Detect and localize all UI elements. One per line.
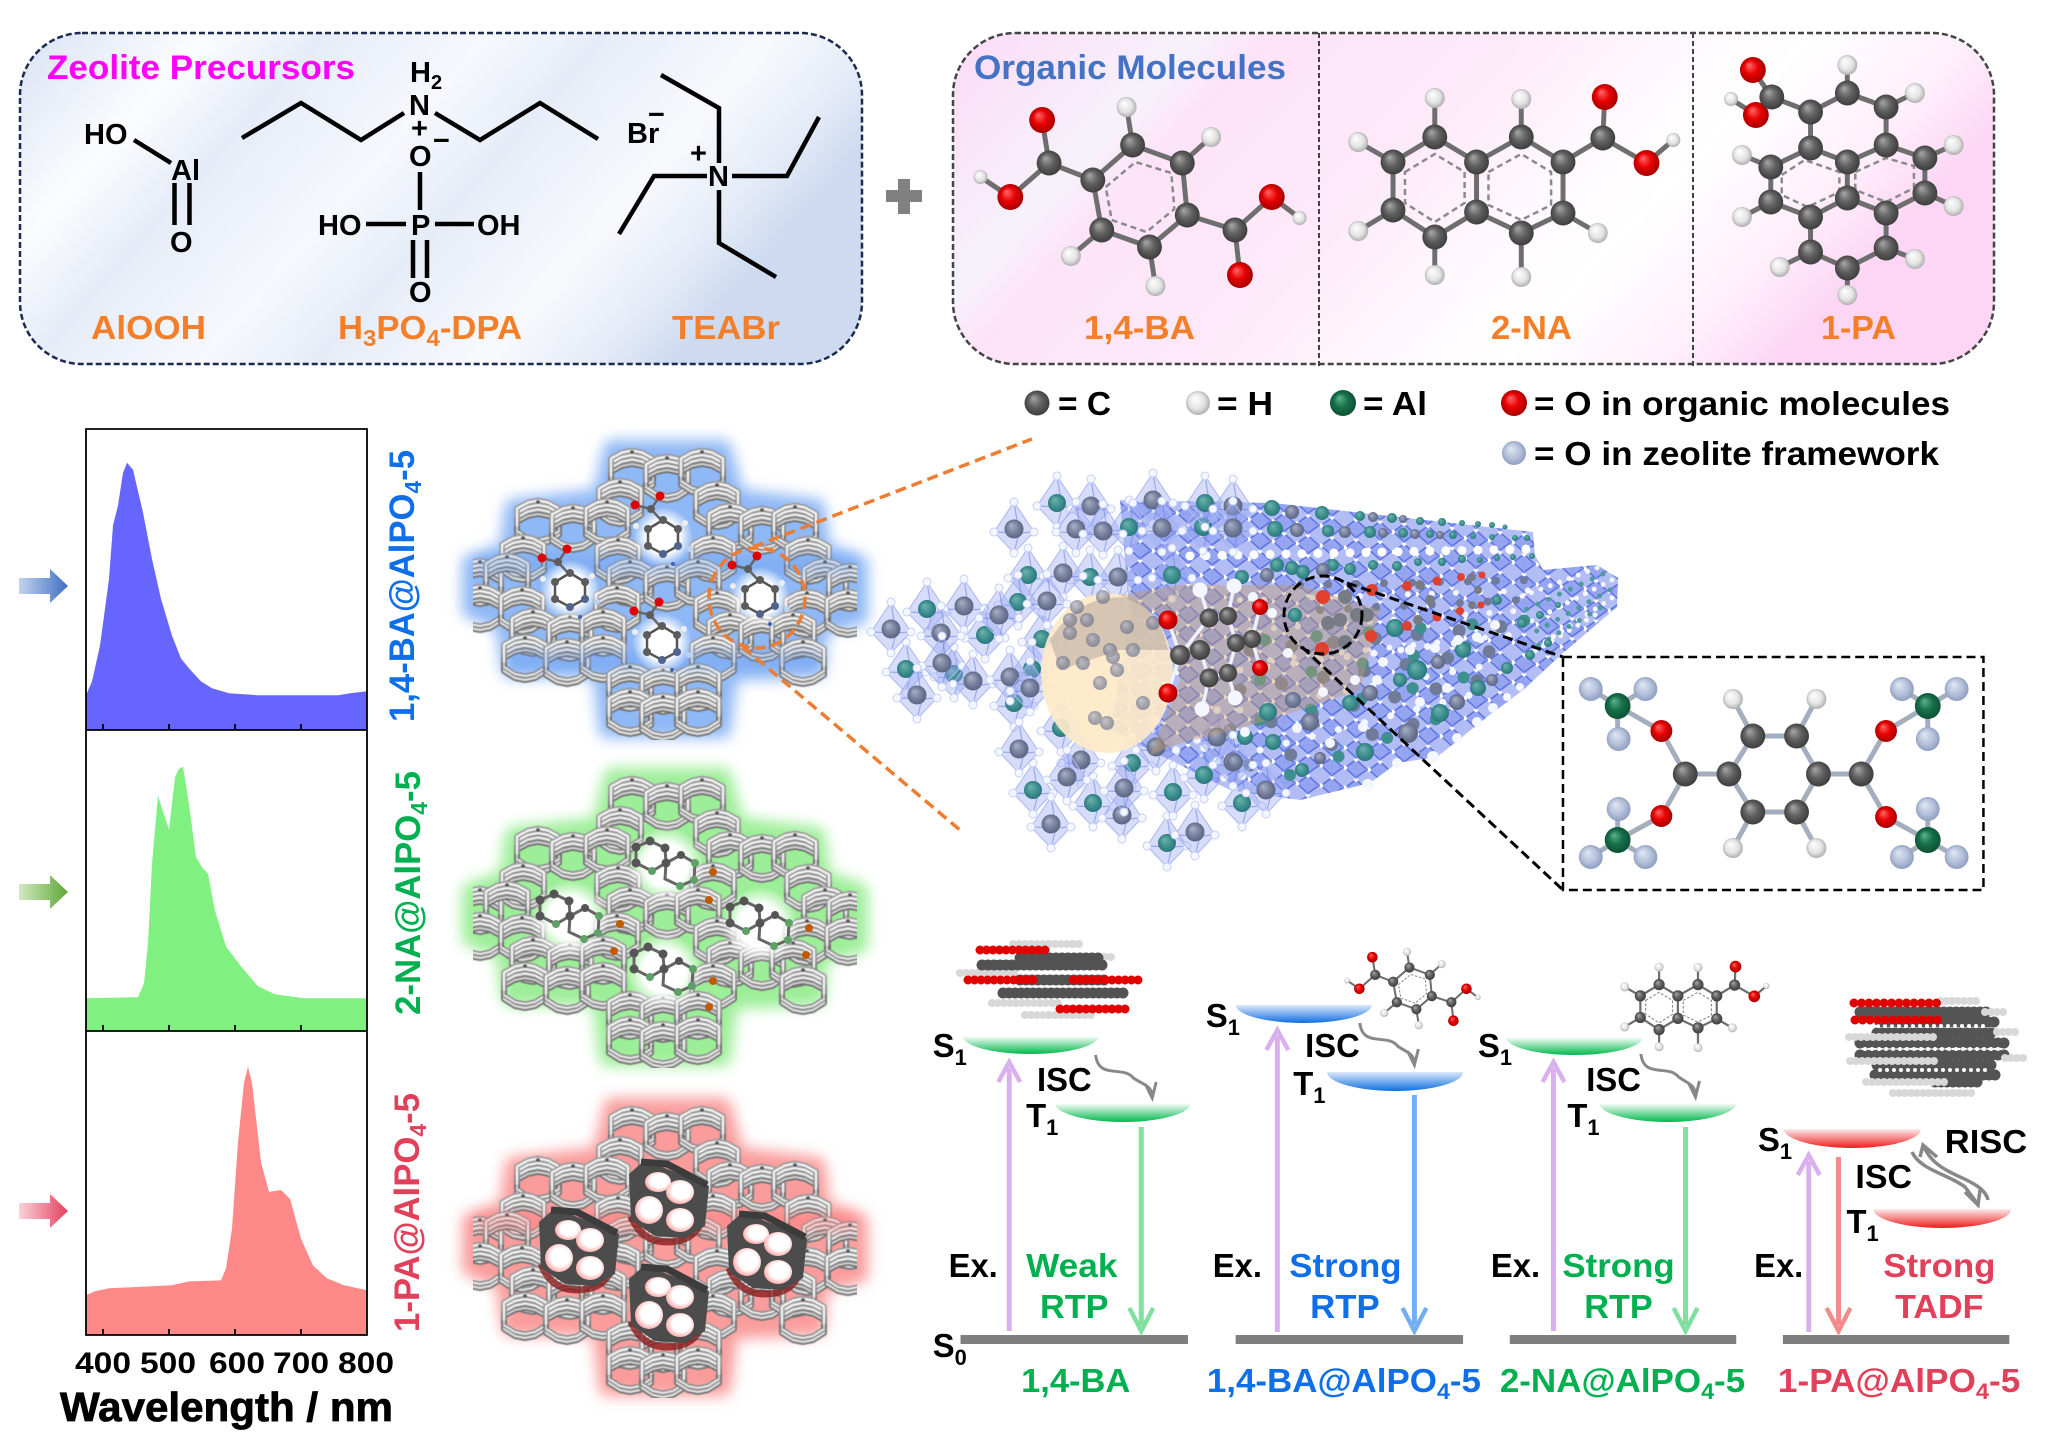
label: 1,4-BA@AlPO4-5 vertical: 1,4-BA@AlPO [383,491,422,722]
energy diagram: 2-NA@AlPO4-5: 2-NA@AlPO [1500,1362,1688,1399]
far tetrahedra rows [1230,568,1612,775]
molecule stack: 1-PA crystal [1849,1001,2025,1093]
energy diagram: 1,4-BA: 0 [955,1345,967,1370]
arrows: ISC and RISC [1912,1145,1988,1205]
energy diagram: 1-PA@AlPO4-5 [1754,1121,2027,1404]
energy diagram: 2-NA@AlPO4-5: Strong [1562,1247,1675,1284]
energy diagram: 1,4-BA: Weak [1026,1247,1118,1284]
label: 1-PA@AlPO4-5 vertical: 4 [405,1124,431,1137]
energy diagram: 1,4-BA@AlPO4-5: S [1206,997,1228,1034]
energy diagram: 2-NA@AlPO4-5: Ex. [1491,1247,1540,1284]
energy diagram: 1,4-BA@AlPO4-5: ISC [1305,1027,1360,1064]
channel wedge background [1110,500,1618,800]
chart: emission spectra [60,429,394,1430]
structure: H3PO4-DPA: O [409,141,432,173]
energy diagram: 2-NA@AlPO4-5 [1478,961,1769,1404]
label: 1-PA@AlPO4-5 vertical: 1-PA@AlPO [388,1135,427,1332]
structure: H3PO4-DPA [242,57,598,309]
structure: AlOOH: HO [84,119,128,151]
axis tick labels: 400 [75,1347,131,1380]
heading: zeolite precursors: Zeolite Precursors [47,49,355,87]
axis tick labels: 700 [273,1347,329,1380]
energy diagram: 1,4-BA: 1,4-BA [1021,1362,1130,1399]
energy diagram: 1-PA@AlPO4-5: 1 [1780,1139,1792,1164]
near-field framework balls [1227,500,1561,791]
zeolite: 2-NA@AlPO4-5 green [459,776,871,1067]
label: H3PO4-DPA: -DPA [440,309,522,346]
callout: black zoom circle and lines [1284,576,1563,890]
energy diagram: 1,4-BA@AlPO4-5: Strong [1289,1247,1402,1284]
energy diagram: 1,4-BA: RTP [1040,1288,1109,1325]
energy diagram: 1-PA@AlPO4-5: RISC [1945,1123,2027,1160]
energy diagram: 1-PA@AlPO4-5: S [1758,1121,1780,1158]
energy diagram: 1-PA@AlPO4-5: Strong [1883,1247,1995,1284]
energy diagram: 1,4-BA@AlPO4-5 [1206,948,1481,1404]
energy diagram: 2-NA@AlPO4-5: -5 [1714,1362,1745,1399]
energy diagram: 2-NA@AlPO4-5: RTP [1584,1288,1653,1325]
guest cage [1041,585,1380,755]
zeolite: 1-PA@AlPO4-5 red [459,1106,871,1397]
axis tick labels: 500 [140,1347,196,1380]
energy diagram: 2-NA@AlPO4-5: 4 [1701,1379,1715,1404]
energy diagram: 1-PA@AlPO4-5: TADF [1895,1288,1984,1325]
structure: H3PO4-DPA: N [409,90,430,122]
structure: H3PO4-DPA: + [411,113,428,145]
molecule: 2-NA [1348,84,1680,287]
energy diagram: 1,4-BA@AlPO4-5: 4 [1437,1379,1451,1404]
label: TEABr: TEABr [672,309,780,346]
label: 2-NA@AlPO4-5 vertical: 4 [406,802,432,815]
molecule: free 1,4-BA [1344,948,1481,1029]
energy diagram: 1,4-BA@AlPO4-5: 1 [1228,1015,1240,1040]
energy diagram: 2-NA@AlPO4-5: 1 [1500,1045,1512,1070]
arrow: blue excitation [19,569,68,603]
energy diagram: 1,4-BA@AlPO4-5: Ex. [1213,1247,1262,1284]
legend: atom colours [1024,385,1950,472]
energy diagram: 1,4-BA: 1 [955,1045,967,1070]
large tetrahedra [867,469,1290,871]
energy diagram: 1,4-BA [933,1027,1191,1399]
inset: 1,4-BA bound to framework [1563,657,1983,890]
structure: H3PO4-DPA: 2 [431,72,442,94]
label: H3PO4-DPA: PO [376,309,426,346]
label: 1,4-BA@AlPO4-5 vertical: 4 [400,481,426,494]
energy diagram: 2-NA@AlPO4-5: S [1478,1027,1500,1064]
label: AlOOH: AlOOH [91,309,206,346]
label: 2-NA@AlPO4-5 vertical: -5 [389,771,428,802]
structure: H3PO4-DPA: OH [477,210,520,242]
3D framework: channel structure [867,469,1618,871]
structure: TEABr [619,75,819,277]
structure: AlOOH [84,119,200,259]
label: 1-PA: 1-PA [1821,309,1896,346]
energy diagram: 1-PA@AlPO4-5: 1-PA@AlPO [1778,1362,1962,1399]
molecule stack: 1,4-BA crystal [960,944,1140,1015]
icon: plus sign [886,179,922,214]
energy diagram: 1-PA@AlPO4-5: Ex. [1754,1247,1803,1284]
energy diagram: 1-PA@AlPO4-5: ISC [1855,1158,1912,1195]
energy diagram: 2-NA@AlPO4-5: T [1567,1097,1587,1134]
energy diagram: 1-PA@AlPO4-5: 4 [1976,1379,1990,1404]
energy diagram: 1,4-BA: ISC [1037,1061,1092,1098]
energy diagram: 1,4-BA: S [933,1027,955,1064]
structure: AlOOH: O [170,227,193,259]
zeolite: 1,4-BA@AlPO4-5 blue [459,448,871,739]
structure: TEABr: − [648,99,665,131]
energy diagram: 1-PA@AlPO4-5: T [1846,1203,1866,1240]
energy diagram: 1-PA@AlPO4-5: -5 [1989,1362,2020,1399]
structure: H3PO4-DPA: − [433,125,450,157]
molecule: free 2-NA [1620,961,1769,1052]
energy diagram: 1,4-BA@AlPO4-5: RTP [1310,1288,1380,1325]
molecule: 1-PA [1724,55,1964,305]
panel: organic molecules [953,33,1994,367]
label: H3PO4-DPA: H [338,309,362,346]
energy diagram: 2-NA@AlPO4-5: 1 [1587,1115,1600,1140]
energy diagram: 1,4-BA: Ex. [949,1247,998,1284]
energy diagram: 1,4-BA@AlPO4-5: 1,4-BA@AlPO [1207,1362,1423,1399]
energy diagram: 1,4-BA@AlPO4-5: 1 [1313,1083,1325,1108]
label: 2-NA@AlPO4-5 vertical: 2-NA@AlPO [389,814,428,1015]
energy diagram: 1,4-BA: 1 [1046,1115,1058,1140]
energy diagram: 2-NA@AlPO4-5: ISC [1586,1061,1641,1098]
label: 1,4-BA: 1,4-BA [1084,309,1195,346]
guest molecules [1158,572,1486,716]
arrow: red excitation [19,1194,68,1228]
structure: H3PO4-DPA: P [411,210,430,242]
structure: TEABr: + [690,138,707,170]
energy diagram: 1,4-BA@AlPO4-5: -5 [1450,1362,1481,1399]
energy diagram: 1,4-BA: T [1026,1097,1046,1134]
legend: atom colours: = O in organic molecules [1534,385,1950,422]
label: 1,4-BA@AlPO4-5 vertical: -5 [383,450,422,481]
arrow: green excitation [19,875,68,909]
label: 1-PA@AlPO4-5 vertical: -5 [388,1093,427,1124]
panel: zeolite precursors [20,33,862,364]
energy diagram: 1-PA@AlPO4-5: 1 [1866,1221,1879,1246]
structure: H3PO4-DPA: H [410,57,431,89]
molecule: 1,4-BA [974,97,1307,296]
energy diagram: 1,4-BA: S [933,1327,955,1364]
legend: atom colours: = H [1217,385,1273,422]
axis title: Wavelength / nm [60,1384,393,1430]
structure: AlOOH: Al [171,155,200,187]
legend: atom colours: = Al [1363,385,1427,422]
callout: orange zoom circle and lines [709,439,1032,830]
axis tick labels: 800 [338,1347,394,1380]
legend: atom colours: = O in zeolite framework [1534,435,1940,472]
axis tick labels [75,1347,394,1380]
plot area with three spectra [86,429,367,1335]
label: H3PO4-DPA: 4 [426,325,440,351]
structure: TEABr: Br [627,118,659,150]
legend: atom colours: = C [1058,385,1111,422]
structure: TEABr: N [708,161,729,193]
axis tick labels: 600 [209,1347,265,1380]
label: H3PO4-DPA: 3 [363,325,376,351]
heading: organic molecules: Organic Molecules [974,49,1286,87]
white gap row [1190,549,1534,556]
label: 2-NA: 2-NA [1491,309,1572,346]
structure: H3PO4-DPA: O [409,277,432,309]
structure: H3PO4-DPA: HO [318,210,362,242]
energy diagram: 1,4-BA@AlPO4-5: T [1293,1065,1313,1102]
